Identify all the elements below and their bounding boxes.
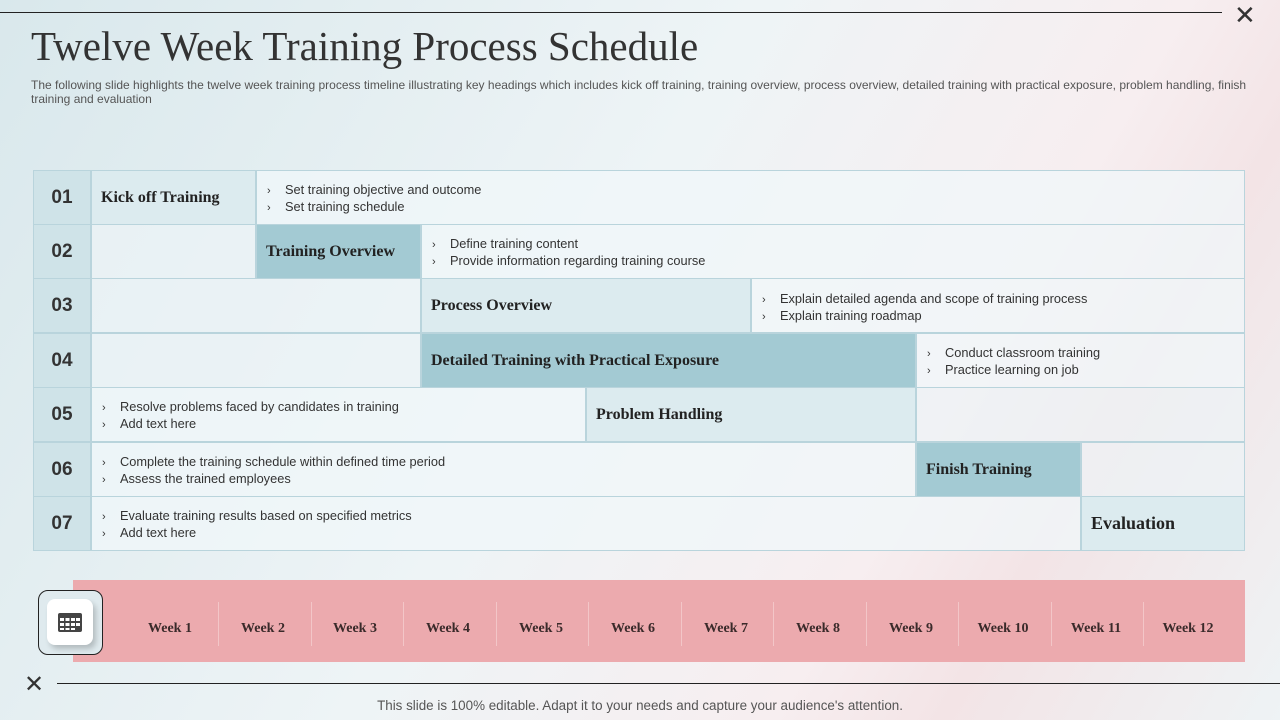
- row 03: [33, 278, 91, 333]
- table: Define training content: [450, 236, 578, 251]
- week labels: Week 9: [889, 621, 933, 636]
- row 06: 06: [51, 458, 73, 480]
- week labels: Week 3: [333, 621, 377, 636]
- row 01: 01: [51, 186, 73, 208]
- week labels: Week 10: [978, 621, 1028, 636]
- table: Kick off Training: [101, 188, 220, 206]
- row 05: [33, 387, 91, 442]
- icon: close top: ✕: [1234, 0, 1256, 30]
- footer text: This slide is 100% editable. Adapt it to your needs and capture your audience's attention.: [377, 698, 903, 713]
- week labels: Week 11: [1071, 621, 1121, 636]
- week labels: Week 6: [611, 621, 655, 636]
- table: Training Overview: [266, 242, 395, 260]
- week labels: [148, 602, 1213, 646]
- table: Detailed Training with Practical Exposure: [431, 352, 719, 368]
- icon: calendar: [38, 590, 103, 655]
- row 04: 04: [51, 350, 73, 370]
- table: Set training schedule: [285, 199, 405, 214]
- week bar: [73, 580, 1245, 662]
- table: Set training objective and outcome: [285, 182, 481, 197]
- row 07: [33, 496, 91, 551]
- table: Finish Training: [926, 460, 1032, 478]
- title: Twelve Week Training Process Schedule: [31, 23, 698, 69]
- icon: close bottom: ✕: [24, 671, 44, 698]
- row 01: [33, 170, 91, 225]
- top line: [0, 12, 1222, 13]
- table: Complete the training schedule within defined time period: [120, 454, 445, 469]
- row 04: [33, 333, 91, 388]
- bottom line: [57, 683, 1280, 684]
- week labels: Week 2: [241, 621, 285, 636]
- table: [33, 170, 1245, 551]
- table: Evaluation: [1091, 513, 1175, 533]
- row 06: [33, 442, 91, 497]
- week labels: Week 5: [519, 621, 563, 636]
- subtitle: The following slide highlights the twelve week training process timeline illustrating key headings which includes kick off training, training overview, process overview, detailed training with practical exposure, problem handling, finish training and evaluation: [31, 78, 1246, 106]
- row 02: 02: [51, 240, 73, 262]
- table: Process Overview: [431, 296, 552, 314]
- table: Add text here: [120, 525, 196, 540]
- table: Explain detailed agenda and scope of training process: [780, 291, 1087, 306]
- table: Add text here: [120, 416, 196, 431]
- table: Resolve problems faced by candidates in training: [120, 399, 399, 414]
- week labels: Week 8: [796, 621, 840, 636]
- week labels: Week 12: [1163, 621, 1213, 636]
- row 07: 07: [51, 512, 73, 534]
- table: Assess the trained employees: [120, 471, 291, 486]
- table: Explain training roadmap: [780, 308, 922, 323]
- table: Problem Handling: [596, 406, 722, 422]
- week labels: Week 4: [426, 621, 470, 636]
- row 02: [33, 224, 91, 279]
- table: Provide information regarding training course: [450, 253, 705, 268]
- table: Conduct classroom training: [945, 345, 1100, 360]
- row 05: 05: [51, 404, 73, 424]
- week labels: Week 7: [704, 621, 748, 636]
- week labels: Week 1: [148, 621, 192, 636]
- table: Practice learning on job: [945, 362, 1079, 377]
- table: Evaluate training results based on specified metrics: [120, 508, 412, 523]
- row 03: 03: [51, 294, 73, 316]
